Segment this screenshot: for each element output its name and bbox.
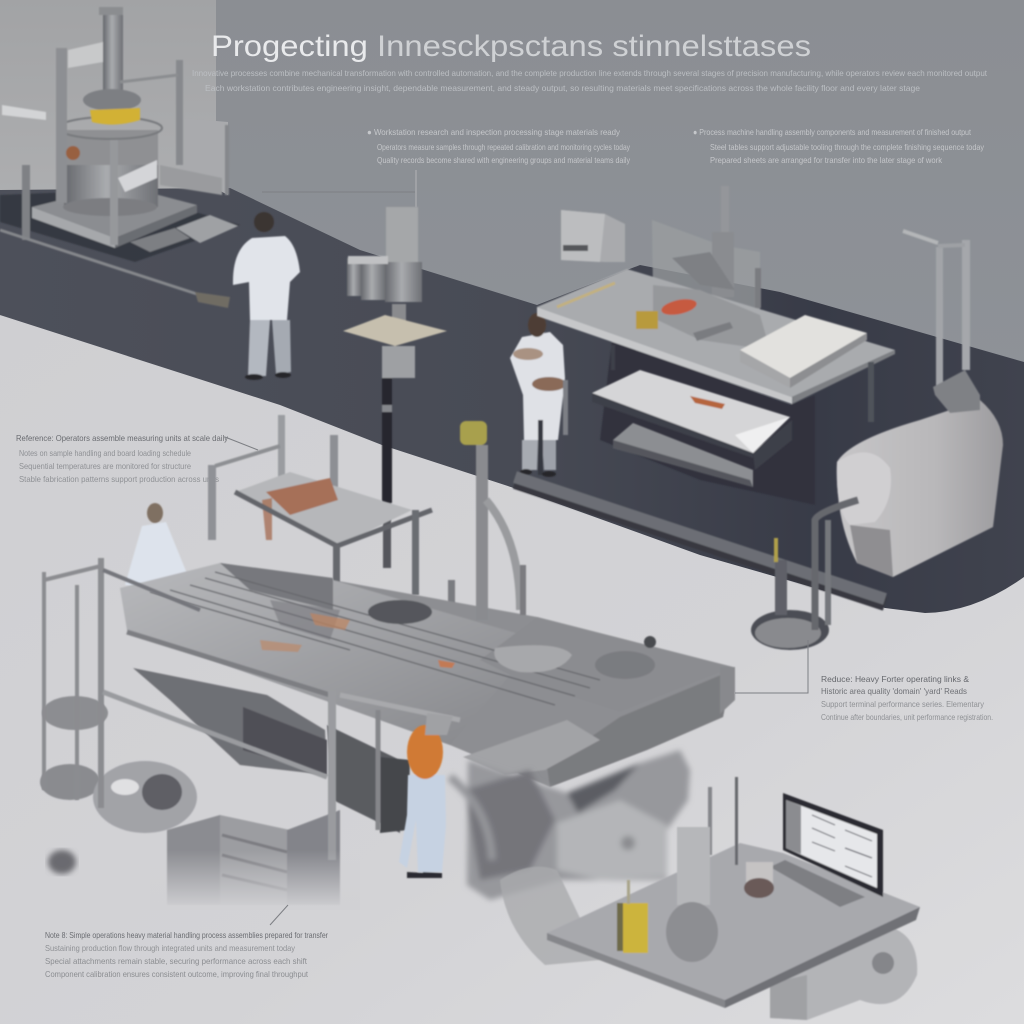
intro text: Each workstation contributes engineering insight, dependable measurement, and steady output, so resulting materials meet specifications across the whole facility floor and every later stage: [205, 83, 920, 93]
machine: top-left press: [0, 7, 240, 308]
title: Progecting Innesckpsctans stinnelsttases: [211, 30, 811, 63]
callout text: right: Historic area quality 'domain' 'yard' Reads: [821, 686, 967, 696]
callout text: top right: ● Process machine handling assembly components and measurement of finished output: [693, 127, 972, 137]
pipe and drain: [515, 477, 885, 650]
lower machinery: [40, 668, 410, 905]
scaffold frame: [44, 558, 460, 860]
callout text: bottom-left: Note 8: Simple operations heavy material handling process assemblies prepared for transfer: [45, 930, 328, 940]
callout text: top centre: [367, 127, 631, 165]
person: white coat top: [233, 212, 300, 380]
callout text: top centre: ● Workstation research and inspection processing stage materials ready: [367, 127, 621, 137]
person: seated operator: [125, 503, 188, 590]
callout text: right: Support terminal performance series. Elementary: [821, 699, 985, 709]
small object: [48, 850, 76, 874]
callout text: bottom-left: Component calibration ensures consistent outcome, improving final throughput: [45, 969, 309, 979]
device: grey box: [561, 210, 625, 262]
callout text: left: Sequential temperatures are monitored for structure: [19, 461, 191, 471]
callout text: top centre: Quality records become shared with engineering groups and material teams daily: [377, 155, 631, 165]
callout text: top right: Prepared sheets are arranged for transfer into the later stage of work: [710, 155, 943, 165]
leader lines: [225, 170, 808, 925]
left wall panel: [0, 0, 216, 195]
lower tray: [592, 370, 792, 487]
callout text: bottom-left: Special attachments remain stable, securing performance across each shift: [45, 956, 308, 966]
desk with computer: [500, 777, 920, 1020]
intro text: [192, 68, 988, 93]
machine: right tank and column: [837, 231, 1003, 577]
callout text: left: Reference: Operators assemble measuring units at scale daily: [16, 433, 229, 443]
person: centre worker: [510, 313, 568, 477]
dark floor: [0, 188, 1024, 613]
callout text: bottom-left: [45, 930, 328, 979]
callout text: left: Stable fabrication patterns support production across units: [19, 474, 219, 484]
callout text: left: Notes on sample handling and board loading schedule: [19, 448, 191, 458]
callout text: top right: [693, 127, 985, 165]
translucent wall extension: [180, 118, 228, 195]
frame table: left: [208, 415, 455, 650]
callout text: bottom-left: Sustaining production flow through integrated units and measurement today: [45, 943, 296, 953]
large conveyor machine: [120, 421, 735, 787]
right under machine: [450, 750, 690, 900]
callout text: left: [16, 433, 229, 484]
person: orange vest worker: [399, 713, 453, 878]
callout text: top centre: Operators measure samples through repeated calibration and monitoring cycles today: [377, 142, 631, 152]
fog over machinery: [150, 850, 360, 910]
intro text: Innovative processes combine mechanical transformation with controlled automation, and the complete production line extends through several stages of precision manufacturing, while operators review each monitored output: [192, 68, 988, 78]
callout text: right: [821, 674, 993, 722]
callout text: right: Reduce: Heavy Forter operating links &: [821, 674, 969, 684]
callout text: top right: Steel tables support adjustable tooling through the complete finishing sequence today: [710, 142, 985, 152]
machine: centre stand: [343, 207, 447, 568]
light floor: [0, 315, 1024, 1024]
workbench: [537, 186, 895, 505]
